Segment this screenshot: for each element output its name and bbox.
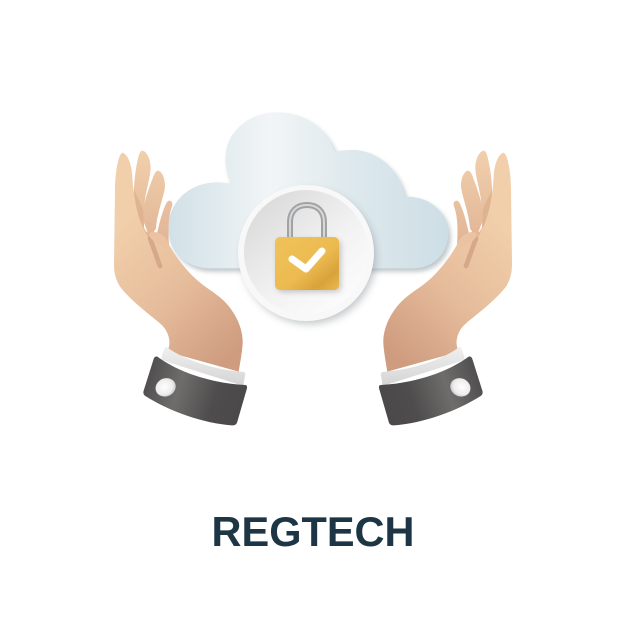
- lock badge: [238, 185, 376, 324]
- lock body: [275, 237, 339, 290]
- disc face: [244, 190, 368, 314]
- cloud: [168, 112, 451, 272]
- disc shadow: [242, 190, 376, 324]
- title: REGTECH: [212, 508, 414, 555]
- cloud body: [168, 112, 448, 268]
- disc rim: [238, 185, 374, 321]
- shackle highlight: [290, 205, 324, 242]
- cloud shadow: [171, 116, 451, 272]
- right hand: [379, 151, 512, 425]
- left hand: [114, 151, 247, 425]
- padlock: [275, 205, 341, 292]
- lock shadow: [277, 240, 341, 292]
- shackle: [290, 205, 324, 242]
- check mark: [292, 251, 322, 269]
